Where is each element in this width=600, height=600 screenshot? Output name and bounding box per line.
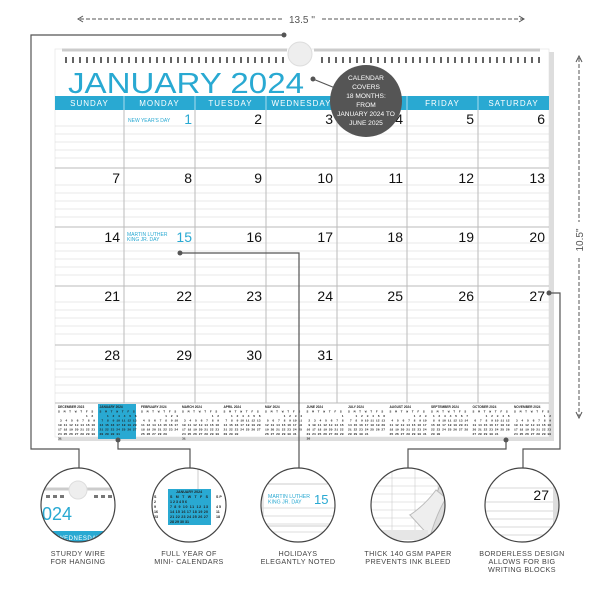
mini calendars strip: 8 9 10 11 12 13 14 [431,418,468,422]
day numbers: 3 [325,111,333,127]
circle: mini calendars: 28 29 30 31 [170,520,189,524]
label: thick paper: PREVENTS INK BLEED [365,557,451,566]
mini calendars strip: 9 10 11 12 13 14 15 [306,423,344,427]
dimension: width 13.5: 13.5 '' [289,15,315,26]
circle: mini calendars: 16 [154,510,158,514]
mini calendars strip: 1 2 3 4 5 6 7 [431,414,468,418]
mini calendars strip: S M T W T F S [182,410,217,414]
mini calendars strip: 25 26 27 28 29 30 31 [390,432,427,436]
mini calendars strip: 27 28 29 30 31 [472,432,499,436]
mini calendars strip: 24 25 26 27 28 29 30 [58,432,95,436]
circle: sturdy wire [40,468,116,544]
header bar: WEDNESDAY [272,99,331,108]
mini calendars strip: MAY 2024 [265,405,280,409]
day numbers: 15 [176,229,192,245]
day numbers [104,111,545,363]
day numbers: 23 [246,288,262,304]
mini calendars strip: 17 18 19 20 21 22 23 [58,428,95,432]
callout: calendar covers 18 months [310,65,402,137]
circle: holidays: 15 [314,492,328,507]
header bar: SUNDAY [70,99,109,108]
mini calendars strip: AUGUST 2024 [390,405,411,409]
day numbers: 7 [112,170,120,186]
circle: mini calendars: S [154,495,157,499]
day numbers: 5 [466,111,474,127]
circle: mini calendars: 14 15 16 17 18 19 20 [170,510,208,514]
circle: holidays: KING JR. DAY [268,500,302,506]
mini calendars strip: S M T W T F S [141,410,176,414]
day numbers: 14 [104,229,120,245]
mini calendars strip: 21 22 23 24 25 26 27 [224,428,261,432]
circle: mini calendars: 23 [154,515,158,519]
mini calendars strip: 2 3 4 5 6 7 8 [306,418,344,422]
circle: mini calendars: 9 [154,505,156,509]
mini calendars strip: 16 17 18 19 20 21 22 [306,428,344,432]
mini calendars strip: 1 2 3 [390,414,427,418]
day numbers: 2 [254,111,262,127]
day numbers: 27 [529,288,545,304]
circle: borderless design [485,468,561,544]
mini calendars strip: 23 24 25 26 27 28 29 [306,432,344,436]
day numbers: 26 [458,288,474,304]
spiral wire [62,42,540,66]
mini calendars strip: NOVEMBER 2024 [514,405,541,409]
day numbers: 29 [176,347,192,363]
mini calendars strip: 17 18 19 20 21 22 23 [514,428,551,432]
day numbers: 4 [395,111,403,127]
label: mini calendars: MINI- CALENDARS [154,557,224,566]
day numbers: 16 [246,229,262,245]
header bar: TUESDAY [208,99,253,108]
header bar: FRIDAY [425,99,460,108]
callout: calendar covers 18 months: 18 MONTHS: [346,93,386,100]
mini calendars strip: 17 18 19 20 21 22 23 [182,428,219,432]
mini calendars strip: 1 2 [58,414,93,418]
day numbers: 31 [317,347,333,363]
circle: sturdy wire: 024 [42,504,72,524]
mini calendars strip: 1 2 [514,414,551,418]
circle: mini calendars: S M T W T F S [170,495,209,499]
day numbers: 22 [176,288,192,304]
day numbers: 6 [537,111,545,127]
label: holidays: ELEGANTLY NOTED [261,557,335,566]
label: thick paper [364,549,452,566]
circle: mini calendars: 1 2 3 4 5 6 [170,500,187,504]
label: mini calendars: FULL YEAR OF [161,549,217,558]
mini calendars strip: S M T W T F S [431,410,466,414]
mini calendars strip: 10 11 12 13 14 15 16 [514,423,551,427]
day numbers: 20 [529,229,545,245]
mini calendars strip: 18 19 20 21 22 23 24 [390,428,427,432]
mini calendars strip: 7 8 9 10 11 12 13 [348,418,385,422]
day numbers: 10 [317,170,333,186]
label: mini calendars [154,549,224,566]
day numbers: 18 [387,229,403,245]
label: sturdy wire: STURDY WIRE [51,549,105,558]
dimension: height 10.5: 10.5" [575,228,586,252]
mini calendars strip: 13 14 15 16 17 18 19 [472,423,510,427]
mini calendars strip: 4 5 6 7 8 9 10 [390,418,427,422]
mini calendars strip: 30 [306,436,310,440]
mini calendars strip: 21 22 23 24 25 26 27 [100,428,137,432]
mini calendars strip: 10 11 12 13 14 15 16 [58,423,95,427]
day numbers: 8 [184,170,192,186]
mini calendars strip: 14 15 16 17 18 19 20 [348,423,385,427]
header bar: SATURDAY [488,99,539,108]
day numbers: 19 [458,229,474,245]
mini calendars strip: 3 4 5 6 7 8 9 [58,418,95,422]
label: sturdy wire [50,549,106,566]
circle: mini calendars: 11 [216,510,220,514]
mini calendars strip: 1 2 3 4 [265,414,302,418]
mini calendars strip: 31 [182,436,186,440]
mini calendars strip: 28 29 30 [224,432,238,436]
mini calendars strip: S M T W T F S [348,410,383,414]
mini calendars strip: JUNE 2024 [306,405,323,409]
mini calendars strip: 1 2 3 4 5 6 [100,414,137,418]
label: borderless: BORDERLESS DESIGN [479,549,565,558]
day numbers: MARTIN LUTHER [127,232,168,238]
callout: calendar covers 18 months: CALENDAR [348,75,384,82]
mini calendars strip: 1 2 3 4 5 [472,414,510,418]
circle: holidays [261,468,339,544]
day numbers: 24 [317,288,333,304]
header bar: THURSDAY [346,99,398,108]
day numbers: 17 [317,229,333,245]
mini calendars strip: 18 19 20 21 22 23 24 [141,428,178,432]
circle: sturdy wire: WEDNESDAY [58,536,101,542]
mini calendars strip: 15 16 17 18 19 20 21 [431,423,468,427]
circle: holidays: MARTIN LUTHER [268,494,310,500]
mini calendars strip: 1 2 3 [141,414,178,418]
mini calendars strip: 1 2 3 4 5 6 [348,414,385,418]
connector lines [31,35,560,468]
mini calendars strip: 12 13 14 15 16 17 18 [265,423,302,427]
mini calendars strip: JULY 2024 [348,405,364,409]
label: holidays [261,549,335,566]
label: sturdy wire: FOR HANGING [50,557,106,566]
circle: thick paper [371,468,447,544]
circle: mini calendars: JANUARY 2024 [176,490,202,494]
mini calendars strip: 4 5 6 7 8 9 10 [141,418,178,422]
mini calendars strip: 19 20 21 22 23 24 25 [265,428,302,432]
day numbers: 30 [246,347,262,363]
mini calendars strip: S M T W T F S [58,410,93,414]
circle: mini calendars: 21 22 23 24 25 26 27 [170,515,208,519]
mini calendars strip: 7 8 9 10 11 12 13 [224,418,261,422]
mini calendars strip: 24 25 26 27 28 29 30 [182,432,219,436]
circle: mini calendars [152,468,228,544]
mini calendars strip: S M T W T F S [390,410,425,414]
label: borderless: ALLOWS FOR BIG [488,557,556,566]
mini calendars strip: S M T W T F S [472,410,508,414]
mini calendars strip: S M T W T F S [265,410,300,414]
mini calendars strip: 26 27 28 29 30 31 [265,432,297,436]
mini calendars strip: 5 6 7 8 9 10 11 [265,418,302,422]
callout: calendar covers 18 months: FROM [356,102,376,109]
circle: mini calendars: 4 5 [216,505,221,509]
day numbers: NEW YEAR'S DAY [128,118,171,124]
mini calendars strip: 10 11 12 13 14 15 16 [182,423,219,427]
mini calendars strip [58,404,551,440]
mini calendars strip: 31 [58,436,62,440]
mini calendars strip: 11 12 13 14 15 16 17 [390,423,427,427]
day numbers: KING JR. DAY [127,237,160,243]
mini calendars strip: DECEMBER 2023 [58,405,84,409]
mini calendars strip: 28 29 30 31 [100,432,120,436]
title: JANUARY 2024 [68,68,304,100]
mini calendars strip: 3 4 5 6 7 8 9 [182,418,219,422]
mini calendars strip: 20 21 22 23 24 25 26 [472,428,510,432]
header bar: MONDAY [139,99,180,108]
mini calendars strip: 29 30 [431,432,440,436]
mini calendars strip: 11 12 13 14 15 16 17 [141,423,178,427]
mini calendars strip: 14 15 16 17 18 19 20 [224,423,261,427]
mini calendars strip: 1 2 [182,414,219,418]
header bar [55,96,549,110]
circle: borderless design: 27 [533,487,549,503]
mini calendars strip: OCTOBER 2024 [472,405,497,409]
label: thick paper: THICK 140 GSM PAPER [364,549,452,558]
mini calendars strip: 1 [306,414,344,418]
mini calendars strip: 22 23 24 25 26 27 28 [431,428,468,432]
circle: mini calendars: 18 [216,515,220,519]
mini calendars strip: S M T W T F S [306,410,342,414]
label: holidays: HOLIDAYS [278,549,318,558]
mini calendars strip: APRIL 2024 [224,405,241,409]
day numbers: 9 [254,170,262,186]
grid [55,126,549,393]
mini calendars strip: JANUARY 2024 [100,405,123,409]
day numbers: 28 [104,347,120,363]
mini calendars strip: FEBRUARY 2024 [141,405,167,409]
mini calendars strip: 14 15 16 17 18 19 20 [100,423,137,427]
day numbers: 11 [388,170,403,186]
day numbers: 25 [387,288,403,304]
circle: mini calendars: S P [216,495,222,499]
mini calendars strip: SEPTEMBER 2024 [431,405,459,409]
mini calendars strip: 6 7 8 9 10 11 12 [472,418,510,422]
day numbers: 13 [529,170,545,186]
mini calendars strip: S M T W T F S [100,410,135,414]
label: borderless: WRITING BLOCKS [488,565,556,574]
mini calendars strip: S M T W T F S [224,410,259,414]
mini calendars strip: 3 4 5 6 7 8 9 [514,418,551,422]
mini calendars strip: 24 25 26 27 28 29 30 [514,432,551,436]
day numbers: 21 [104,288,120,304]
circle: mini calendars: 2 [154,500,156,504]
day numbers: 1 [184,111,192,127]
mini calendars strip: 25 26 27 28 29 [141,432,167,436]
mini calendars strip: 21 22 23 24 25 26 27 [348,428,385,432]
day numbers: 12 [458,170,474,186]
dimension: width 13.5 [78,15,524,26]
mini calendars strip: MARCH 2024 [182,405,202,409]
callout: calendar covers 18 months: COVERS [352,84,381,91]
mini calendars strip: 7 8 9 10 11 12 13 [100,418,137,422]
mini calendars strip: 1 2 3 4 5 6 [224,414,261,418]
mini calendars strip: 28 29 30 31 [348,432,369,436]
mini calendars strip: S M T W T F S [514,410,549,414]
circle: mini calendars: 7 8 9 10 11 12 13 [170,505,208,509]
callout: calendar covers 18 months: JUNE 2025 [349,120,383,127]
dimension: height 10.5 [575,56,586,418]
callout: calendar covers 18 months: JANUARY 2024 TO [337,111,395,118]
label: borderless [479,549,565,574]
calendar [55,42,554,441]
